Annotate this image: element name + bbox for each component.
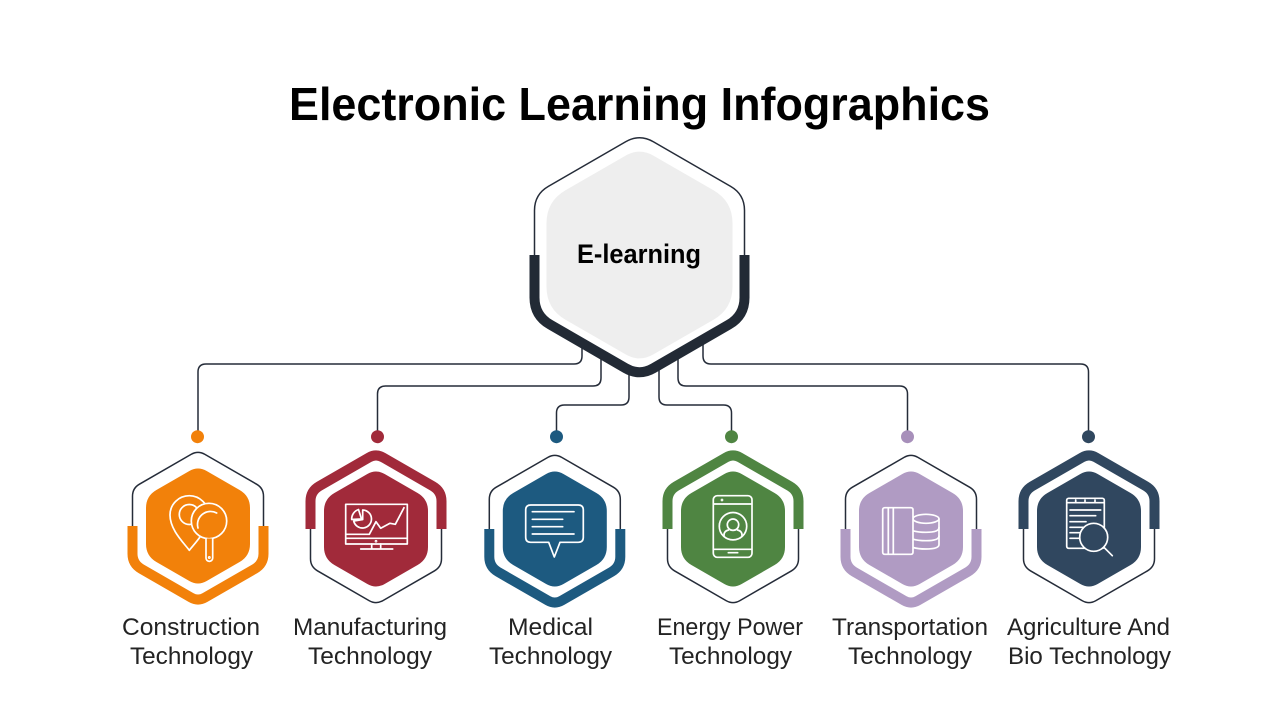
icon: card and coin stack xyxy=(883,508,939,554)
panel: construction technology xyxy=(122,430,264,670)
label xyxy=(832,614,988,670)
label xyxy=(1007,614,1171,670)
label: Medical xyxy=(508,614,593,641)
label xyxy=(293,614,447,670)
title: Electronic Learning Infographics xyxy=(289,78,990,130)
panel: medical technology xyxy=(489,430,620,670)
icon: location pin and magnifier xyxy=(170,496,227,561)
panel: agriculture and bio technology xyxy=(1007,430,1171,670)
label: Technology xyxy=(130,643,253,670)
label: Technology xyxy=(848,643,972,670)
label: Technology xyxy=(308,643,432,670)
panel: manufacturing technology xyxy=(293,430,447,670)
panel: transportation technology xyxy=(832,430,988,670)
hexagon xyxy=(668,455,798,603)
central label: E-learning xyxy=(577,239,701,269)
central hexagon outline and base xyxy=(534,138,744,372)
connector lines xyxy=(198,343,1088,437)
connector dot xyxy=(371,430,384,443)
hexagon xyxy=(846,455,976,603)
label xyxy=(657,614,803,670)
hexagon xyxy=(310,455,442,603)
icon: smartphone with user xyxy=(713,496,752,557)
icon: speech bubble xyxy=(526,505,583,557)
hexagon xyxy=(1024,455,1154,603)
panel: energy power technology xyxy=(657,430,803,670)
label xyxy=(489,614,612,670)
label: Manufacturing xyxy=(293,614,447,641)
connector dot xyxy=(725,430,738,443)
hexagon xyxy=(489,455,620,603)
label: Agriculture And xyxy=(1007,614,1170,641)
label xyxy=(122,614,260,670)
hexagon xyxy=(132,452,264,600)
label: Technology xyxy=(489,643,612,670)
label: Technology xyxy=(669,643,792,670)
connector dot xyxy=(550,430,563,443)
label: Energy Power xyxy=(657,614,803,641)
label: Transportation xyxy=(832,614,988,641)
central hexagon: E-learning xyxy=(534,138,744,372)
label: Bio Technology xyxy=(1008,643,1171,670)
icon: document with magnifier xyxy=(1067,498,1112,556)
label: Construction xyxy=(122,614,260,641)
connector dot xyxy=(1082,430,1095,443)
connector dot xyxy=(901,430,914,443)
icon: monitor with chart xyxy=(346,504,407,549)
connector dot xyxy=(191,430,204,443)
